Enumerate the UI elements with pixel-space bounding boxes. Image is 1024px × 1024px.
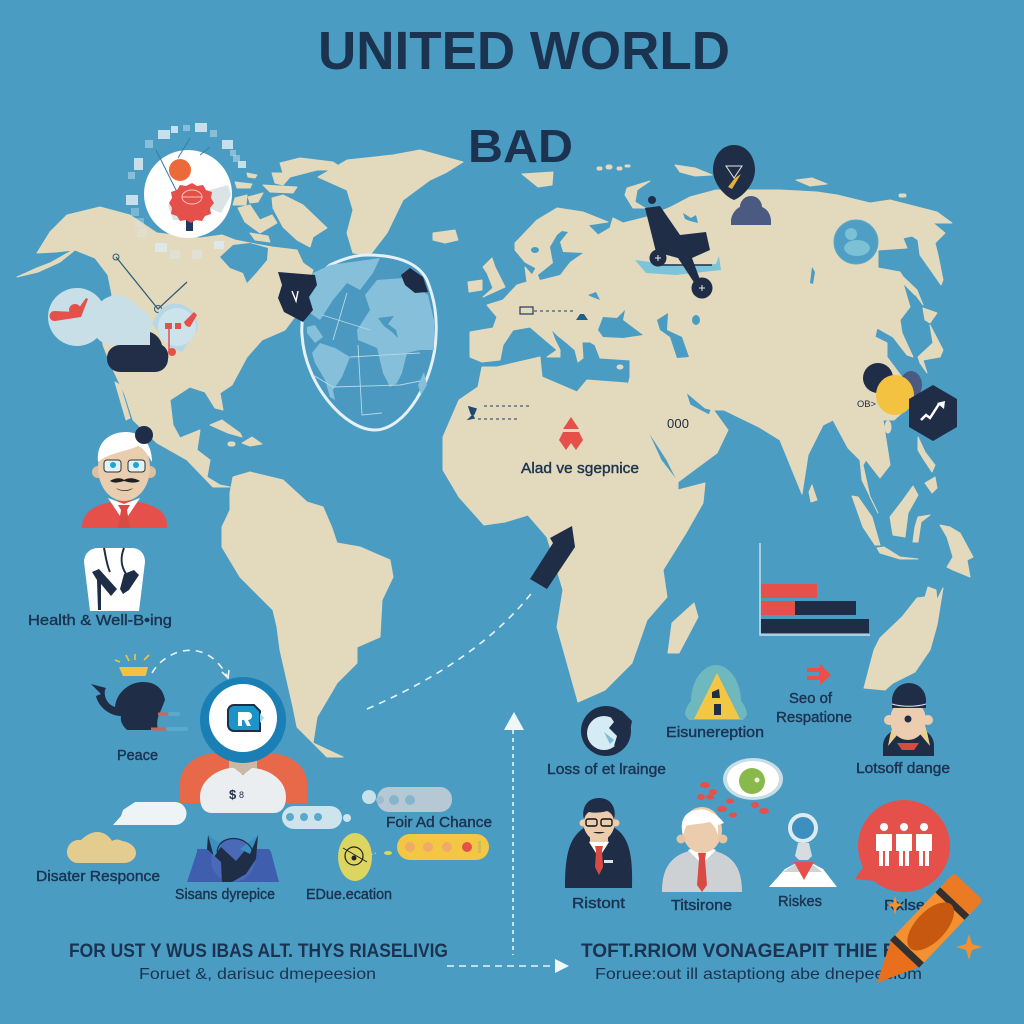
speech bubble grey with dots [362,787,452,812]
subtitle BAD: BAD [468,120,573,172]
person: white-haired man in grey suit [662,807,742,892]
Eurasia [470,190,952,513]
icon: peace figure with crown [91,654,186,730]
Caribbean islands [210,420,262,446]
label: lotsof dange: Lotsoff dange [856,761,950,777]
label: titsirone: Titsirone [671,898,732,914]
person: guard with helmet [883,683,934,756]
icon: large orange sparkle [956,934,982,960]
label: peace: Peace [117,748,158,764]
North America [17,207,313,487]
label: eisunereption: Eisunereption [666,725,764,741]
Greenland [318,150,463,255]
icon: hooded figure [731,196,771,225]
map label 000: 000 [667,416,689,431]
Madagascar [668,603,698,653]
small dashed route icons [469,307,588,419]
map label Africa: Alad ve sgepnice [521,461,639,477]
icon: dark blob marker [401,268,428,293]
label: sisans dyrepice: Sisans dyrepice [175,887,275,903]
label: sea of response: Seo of [789,691,833,707]
icon: dark shield marker [278,272,317,322]
label: health and well-being: Health & Well-B•ing [28,612,172,629]
icon: yellow egg with target [338,833,392,881]
label: risks: Rxlse [884,898,925,914]
Arctic islands [233,158,458,247]
icon: blue mountain with dark shield [187,835,279,882]
label: disaster response: Disater Responce [36,869,160,885]
icon: balloon cluster with growth hexagon [863,363,957,441]
label: education: EDue.ecation [306,887,392,903]
icon: tan cloud [67,832,136,863]
Africa [443,357,705,702]
icon: dial circle [581,706,632,756]
speech bubble light with dots [282,806,351,829]
Baja California [115,382,130,420]
heading: bottom right: TOFT.RRIOM VONAGEAPIT THIE EAR [581,941,923,962]
label: riskes: Riskes [778,894,822,910]
Sakhalin and Japan [898,272,943,373]
dark arrow with dashed trail [367,526,575,709]
label: sea of response [776,691,852,726]
world map [17,150,973,757]
dashed vertical arrow [504,712,524,955]
icon: dark vehicle on lake [635,196,721,298]
label: loss of et lrainnge: Loss of et lrainge [547,762,666,778]
person: badge head with orange shoulders: 8 [239,790,244,800]
Southeast Asia islands [809,421,973,577]
dashed horizontal arrow [447,959,569,973]
label: ristont: Ristont [572,896,625,912]
Britain, Ireland and northern islands [468,165,906,369]
red thought dots [697,782,769,818]
icon: weather gauges and cloud [48,254,197,372]
icon: blue circle badge [834,220,878,264]
Hudson Bay [220,243,268,283]
heading: bottom left: FOR UST Y WUS IBAS ALT. THYS RIASELIVIG [69,941,448,962]
icon: warning triangle [685,665,747,720]
icon: red bubble with three people [855,800,950,892]
title: UNITED WORLD [318,21,730,81]
person: man in dark suit [565,798,632,888]
dashed arc arrow [152,650,229,678]
label: sea of response: Respatione [776,710,852,726]
person: badge head with orange shoulders [180,677,307,813]
Australia [864,587,943,690]
icon: magnifier person [769,815,837,887]
person: older man with moustache [82,426,167,528]
icon: eye [723,758,783,800]
icon: red warning emblem [559,417,583,450]
text: bottom left description: Foruet &, darisuc dmepeesion [139,966,376,983]
person: badge head with orange shoulders: $ [229,787,237,802]
small label OB: OB> [857,399,876,409]
icon: red arrow [807,664,831,685]
icon: globe inset [302,255,436,430]
icon: gear in white circle with ring [126,123,246,259]
label: for ad chance: Foir Ad Chance [386,814,492,831]
icon: small orange sparkle [887,896,903,915]
speech bubble yellow with dots [397,834,489,860]
inland seas [531,213,815,358]
text: bottom right description: Foruee:out ill astaptiong abe dnepeesiom [595,966,922,983]
bar chart [760,543,870,635]
icon: orange crayon [862,873,983,997]
icon: location pin [713,145,755,200]
South America [222,472,393,757]
speech bubble white [113,802,186,825]
person: doctor coat with stethoscope [84,548,145,611]
